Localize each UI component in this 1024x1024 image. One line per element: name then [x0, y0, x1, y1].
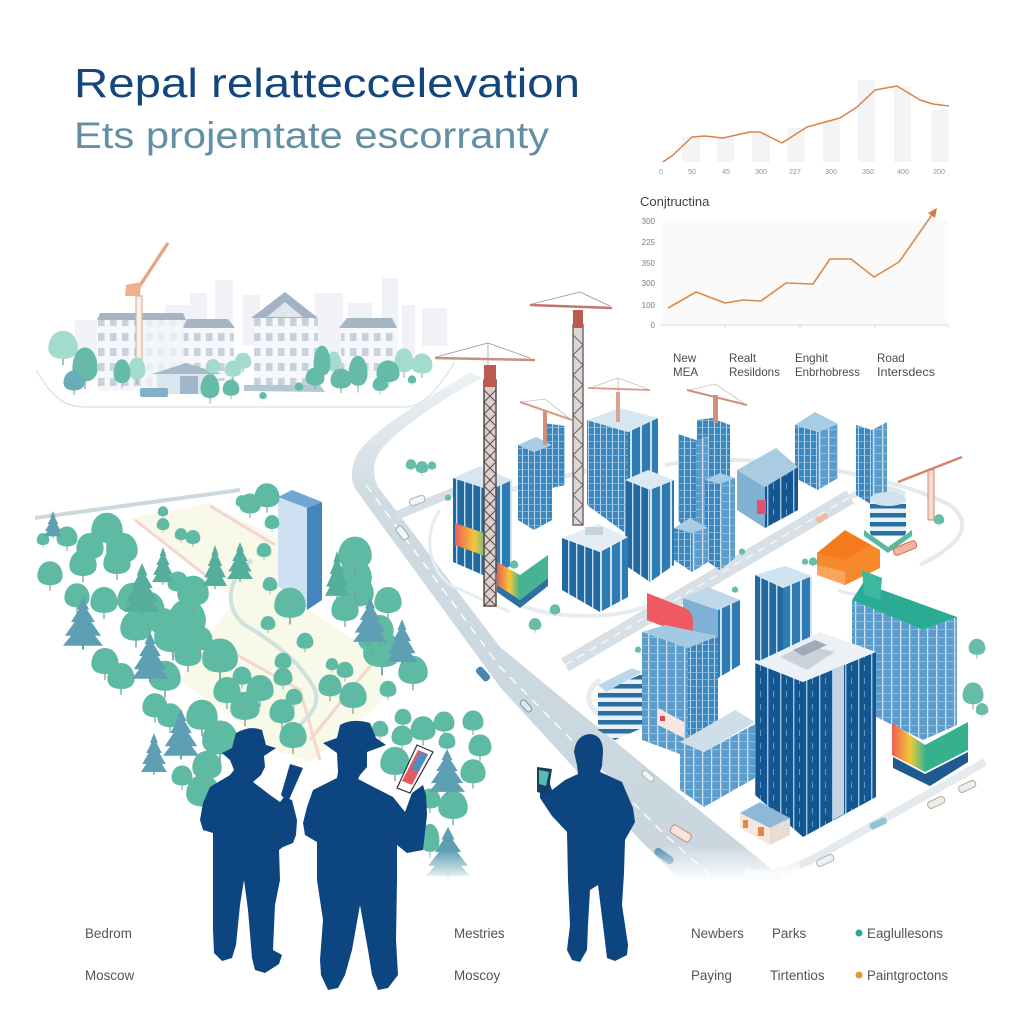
building four — [339, 318, 398, 378]
chart legend labels: Resildons — [729, 366, 780, 379]
bottom labels middle: Moscoy — [454, 968, 500, 983]
park ground — [130, 503, 390, 762]
cars — [395, 494, 977, 867]
person three silhouette — [537, 734, 635, 962]
phone with screen — [397, 745, 433, 793]
chart legend labels: Intersdecs — [877, 366, 935, 379]
red billboard — [647, 593, 693, 640]
chart: construction line chart: 225 — [642, 238, 656, 247]
tower D — [625, 470, 674, 582]
chart: construction line chart: 350 — [642, 259, 656, 268]
chart legend labels: New — [673, 352, 697, 365]
chart: construction line chart: 300 — [642, 217, 656, 226]
pavilion — [140, 363, 222, 397]
person one silhouette — [200, 728, 303, 973]
bottom labels left: Bedrom — [85, 926, 132, 941]
chart: top line and bars: 0 — [659, 169, 663, 176]
building three — [244, 292, 325, 392]
chart legend labels: MEA — [673, 366, 698, 379]
teal conifers — [124, 542, 349, 616]
tower L — [683, 587, 740, 678]
title: Repal relatteccelevation — [74, 60, 580, 106]
tower C — [587, 408, 658, 535]
legend item teal: Eaglullesons — [867, 926, 943, 941]
chart title: Conjtructina — [640, 194, 710, 209]
chart: construction line chart — [640, 194, 948, 330]
bottom labels left — [85, 926, 134, 983]
subtitle: Ets projemtate escorranty — [74, 115, 550, 156]
arrow head — [928, 208, 937, 218]
low block N — [680, 710, 755, 807]
chart legend labels — [673, 352, 935, 379]
round trees — [37, 483, 492, 858]
legend item orange: Paintgroctons — [867, 968, 948, 983]
crane four — [687, 384, 747, 423]
bottom labels middle: Mestries — [454, 926, 505, 941]
teal trees — [64, 346, 416, 404]
park path — [35, 490, 240, 518]
tower in park — [278, 490, 322, 610]
bottom labels middle — [454, 926, 505, 983]
chart legend labels: Realt — [729, 352, 757, 365]
road fade — [620, 845, 800, 882]
bottom labels right: Paying — [691, 968, 732, 983]
title — [74, 60, 580, 156]
chart: top line and bars: 200 — [933, 169, 945, 176]
chart: top line and bars: 50 — [688, 169, 696, 176]
tower B — [518, 423, 565, 530]
tower K — [755, 566, 812, 665]
panel: downtown construction district — [395, 292, 988, 882]
bottom labels left: Moscow — [85, 968, 134, 983]
chart legend labels: Enbrhobress — [795, 366, 860, 379]
chart: top line and bars: 400 — [897, 169, 909, 176]
crane one — [435, 343, 535, 606]
tower E — [562, 524, 628, 612]
bottom labels right — [691, 926, 825, 983]
chart: top line and bars: 45 — [722, 169, 730, 176]
bottom labels right: Parks — [772, 926, 807, 941]
ground outline — [36, 362, 455, 407]
crane two — [530, 292, 612, 525]
street trees — [406, 459, 988, 718]
front buildings — [598, 566, 968, 845]
light trees — [48, 331, 433, 384]
chart: construction line chart: 0 — [651, 321, 656, 330]
billboard — [892, 722, 968, 786]
phone — [537, 767, 552, 795]
chart: top line and bars: 300 — [755, 169, 767, 176]
bottom labels right: Tirtentios — [770, 968, 825, 983]
panel: historic district — [36, 243, 455, 407]
chart: top line and bars: 300 — [825, 169, 837, 176]
billboard kiosk — [497, 555, 548, 608]
skyline — [75, 278, 447, 370]
tower I — [856, 422, 887, 505]
chart: top line and bars: 227 — [789, 169, 801, 176]
crane six — [898, 457, 962, 520]
tower F cluster — [678, 418, 735, 570]
cranes — [435, 292, 962, 606]
bottom labels right: Newbers — [691, 926, 744, 941]
striped building — [598, 668, 642, 740]
back buildings — [453, 408, 912, 612]
chart legend labels: Enghit — [795, 352, 829, 365]
chart legend labels: Road — [877, 352, 905, 365]
crane — [125, 243, 168, 376]
main road — [352, 372, 785, 880]
tower H — [795, 412, 838, 490]
person two silhouette — [303, 721, 433, 990]
chart: construction line chart: 100 — [642, 301, 656, 310]
crane three — [588, 378, 650, 422]
panel: city park — [35, 483, 492, 882]
round tower J — [864, 492, 912, 553]
secondary roads — [398, 460, 985, 874]
phone — [281, 764, 303, 802]
chart: top line and bars — [659, 80, 949, 176]
tower M — [642, 625, 718, 757]
corner shop — [740, 802, 790, 845]
orange building — [817, 530, 880, 585]
building two — [183, 319, 235, 381]
low building G — [737, 448, 798, 528]
chart: construction line chart: 300 — [642, 279, 656, 288]
teal roof building P — [852, 570, 957, 740]
tower A — [453, 466, 512, 578]
main tower O — [755, 632, 876, 837]
chart: top line and bars: 350 — [862, 169, 874, 176]
small block — [674, 518, 708, 572]
crane five — [520, 399, 572, 445]
blue conifers — [44, 511, 470, 880]
building one — [97, 313, 186, 391]
